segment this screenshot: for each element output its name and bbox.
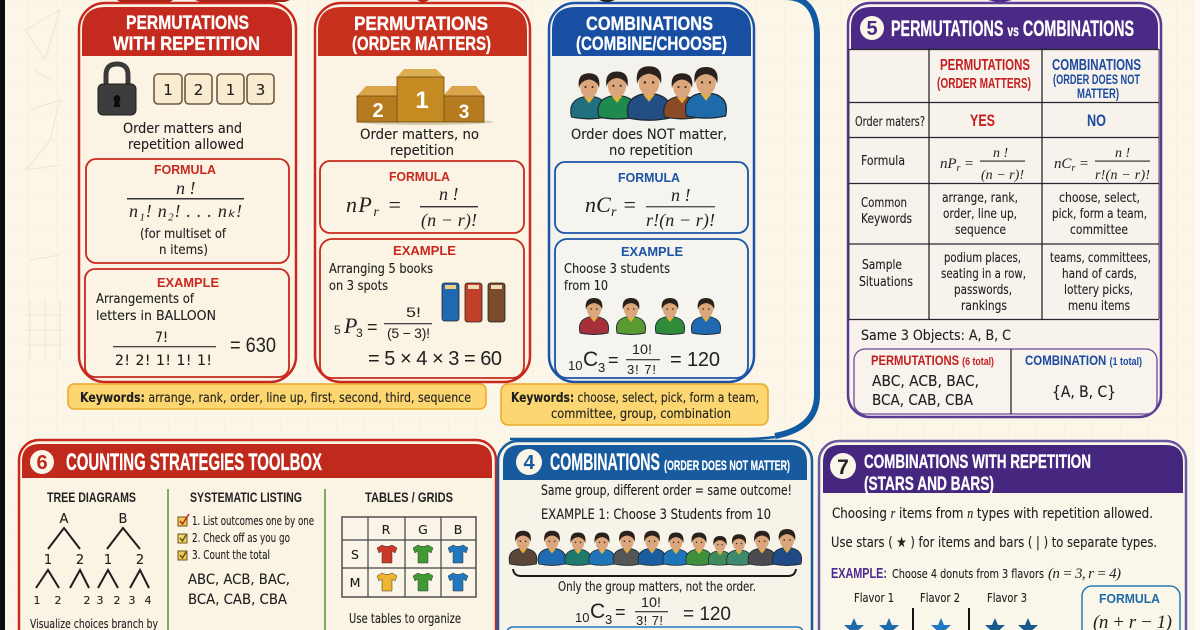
table row: common keywords: Keywords [861,211,912,227]
table column headers: PERMUTATIONS [940,57,1030,74]
example box: = [608,350,619,370]
keywords: combinations: committee, group, combination [551,407,731,422]
icon: padlock [98,64,136,115]
table row: formula: r [956,163,960,174]
table row: sample situations: hand of cards, [1062,266,1137,282]
example box: 7! [155,330,168,346]
table row: sample situations: lottery picks, [1064,282,1133,298]
badge 7: 7 [837,456,849,479]
comparison box: PERMUTATIONS (6 total) [871,352,994,368]
table row: sample situations: teams, committees, [1050,250,1151,266]
text: description: Order does NOT matter, [571,127,727,143]
text: description [360,127,479,159]
table row: formula: n ! [1115,146,1130,161]
text: description: Order matters, no [360,127,479,143]
icon: four students [579,298,721,334]
tree diagram: B [119,512,127,527]
heading [113,13,260,55]
icon: books [442,283,505,322]
formula box: r [373,205,379,220]
example box: EXAMPLE [393,243,456,258]
column: systematic listing: ABC, ACB, BAC, [188,572,290,588]
example box [320,239,524,378]
text: description: Order matters and [123,121,242,137]
panel: combinations combine choose [549,3,754,382]
bracket [513,569,796,576]
example box [85,269,289,377]
formula box: n₁! n₂! . . . nₖ! [129,201,242,221]
example box: 10 [568,358,582,373]
column: systematic listing: SYSTEMATIC LISTING [190,489,302,505]
text: example: EXAMPLE: [831,565,887,582]
keywords: permutations [68,384,486,409]
comparison box: ABC, ACB, BAC, [872,372,979,390]
table column headers: COMBINATIONS [1052,57,1141,74]
example box: EXAMPLE [157,275,219,290]
text: description: repetition [390,143,454,159]
table row: common keywords: committee [1070,222,1128,238]
formula box: FORMULA [154,162,217,177]
table row: order matters: YES [970,111,995,130]
formula box [320,161,524,233]
table row: formula: r [1071,163,1075,174]
example box [555,239,748,378]
keywords: combinations [501,384,768,425]
table column headers [937,57,1141,101]
icon: number tiles: 2 [194,81,203,99]
table row: sample situations [859,250,1151,314]
text: description [571,127,727,159]
text: same 3 objects: Same 3 Objects: A, B, C [861,328,1011,344]
shirt table: M [350,575,360,590]
formula box: n ! [176,178,196,198]
table row: order matters [855,111,1106,130]
column: tables and grids: TABLES / GRIDS [365,489,453,505]
table row: sample situations: menu items [1068,298,1130,314]
table row: order matters: Order maters? [855,114,925,130]
shirt table: R [382,522,391,537]
keywords: permutations: Keywords: arrange, rank, order, line up, first, second, third, sequence [80,391,471,406]
heading [352,14,491,55]
tree diagram: 1 [104,553,112,568]
formula box: r!(n − r)! [646,210,715,231]
table row: sample situations: Situations [859,274,913,290]
comparison box: BCA, CAB, CBA [872,391,974,409]
heading: COMBINATIONS [550,449,660,476]
heading: COMBINATIONS [586,14,713,35]
formula: 10C3: = 120 [683,604,731,625]
formula box: n ! [671,185,690,205]
icon: podium: 2 [372,100,384,122]
formula: 10C3: 10 [575,610,589,625]
formula box [555,162,748,233]
badge 4: 4 [523,452,535,474]
formula box: nC [585,192,611,217]
panel: permutations vs combinations [848,3,1161,417]
column: tree diagrams: TREE DIAGRAMS [47,489,136,505]
table row: formula [861,146,1150,183]
icon: twelve students [509,529,802,566]
table row: common keywords [861,190,1147,238]
tree diagram: 2 [136,553,144,568]
formula: 10C3 [575,594,731,628]
table column headers: (ORDER MATTERS) [937,75,1031,92]
formula box: r [611,205,617,220]
formula: 10C3: 10! [641,594,661,610]
shirt table: G [418,522,428,537]
example box: on 3 spots [329,278,388,294]
column: systematic listing: 1. List outcomes one by one [192,514,314,528]
heading: COMBINATIONS WITH REPETITION [864,452,1091,473]
heading: (STARS AND BARS) [864,474,994,495]
icon: number tiles [154,74,274,104]
comparison box: {A, B, C} [1052,382,1116,401]
heading: (COMBINE/CHOOSE) [576,34,727,55]
table row: sample situations: podium places, [944,250,1021,266]
stars and bars diagram: Flavor 1 [854,590,894,605]
stars and bars diagram: Flavor 2 [920,590,960,605]
shirt table: S [351,547,359,562]
table row: formula: = [960,156,974,172]
icon: checkboxes [178,514,189,560]
column: systematic listing: 2. Check off as you go [192,531,290,545]
text: choosing items: Choosing r items from n types with repetition allowed. [832,506,1153,522]
panel: combinations order does not matter [498,441,812,630]
heading: (ORDER MATTERS) [352,34,491,55]
tree diagram: A [60,512,69,527]
tree diagram: 2 [84,594,90,607]
column: tables and grids [342,489,476,627]
top pointer tips [117,0,1012,3]
example box: 10! [632,341,652,357]
example box: = 120 [670,349,720,371]
badge 6 [30,450,54,474]
example box: P [343,313,357,338]
formula box: (n − r)! [421,210,477,231]
tree diagram: 1 [44,553,52,568]
example box: C [583,348,598,371]
panel: permutations order matters [315,3,530,382]
example box: 5 [334,323,341,337]
tree diagram [34,512,152,607]
formula box: FORMULA [1099,591,1161,606]
table row: formula: nC [1054,156,1071,172]
badge 6: 6 [36,452,48,474]
table row: common keywords: sequence [955,222,1006,238]
text: description: no repetition [609,143,693,159]
comparison box: COMBINATION (1 total) [1025,352,1142,368]
formula box [1082,586,1180,630]
example box: 3 [598,360,605,375]
tree diagram: 2 [54,594,62,607]
formula box: n items) [159,242,208,258]
formula: 10C3: C [590,600,605,623]
text: only the group matters: Only the group matters, not the order. [558,579,756,595]
example box: = [367,317,378,337]
example box: 2! 2! 1! 1! 1! [115,353,212,369]
formula box [86,159,289,263]
table row: sample situations: seating in a row, [941,266,1026,282]
table column headers: (ORDER DOES NOT [1053,72,1141,87]
heading: PERMUTATIONS [126,13,249,34]
text: example: Choose 4 donuts from 3 flavors [892,566,1044,581]
table row: order matters: NO [1087,111,1106,130]
icon: number tiles: 3 [256,81,265,99]
table row: sample situations: Sample [862,257,902,273]
icon: podium: 3 [459,102,469,123]
text: example 1: EXAMPLE 1: Choose 3 Students from 10 [541,507,771,523]
heading: COUNTING STRATEGIES TOOLBOX [66,449,322,476]
badge 5 [860,16,884,40]
text: description: repetition allowed [128,137,244,153]
column: tree diagrams [30,489,158,630]
table row: common keywords: arrange, rank, [942,190,1018,206]
example box: 3! 7! [627,362,656,377]
example box: (5 − 3)! [387,325,430,341]
stars and bars diagram: Flavor 3 [987,590,1027,605]
example box: EXAMPLE [621,244,683,259]
keywords: combinations: Keywords: choose, select, pick, form a team, [511,391,759,406]
big blue frame around panels [510,0,817,439]
heading [576,14,727,55]
stars and bars diagram [844,590,1038,630]
icon: number tiles: 1 [163,81,173,99]
icon: number tiles: 1 [226,81,235,99]
icon: podium: 1 [415,87,429,114]
icon: group of five people [571,66,726,120]
text: same group: Same group, different order = same outcome! [541,483,792,499]
formula: 10C3: 3! 7! [636,613,663,628]
table row: common keywords: order, line up, [943,206,1017,222]
example box: = 5 × 4 × 3 = 60 [368,348,502,370]
column: systematic listing: BCA, CAB, CBA [188,592,287,608]
tree diagram: 1 [34,594,40,607]
column: systematic listing [178,489,314,608]
table row: formula: (n − r)! [981,168,1024,183]
formula: 10C3: = [615,602,626,622]
formula box: (for multiset of [140,226,227,242]
tree diagram: 3 [128,594,136,607]
tree diagram: 4 [144,594,152,607]
formula box: n ! [439,184,458,204]
formula box: FORMULA [618,170,681,185]
example box: letters in BALLOON [96,308,216,324]
table row: common keywords: pick, form a team, [1052,206,1147,222]
tree diagram: 2 [114,594,120,607]
table row: formula: Formula [861,153,905,169]
tree diagram: 3 [96,594,104,607]
tree diagram: 2 [76,553,84,568]
heading: WITH REPETITION [113,34,260,55]
badge 5: 5 [866,18,878,40]
example box: = 630 [230,334,276,357]
panel: counting strategies toolbox [19,440,496,630]
table row: formula: r!(n − r)! [1095,168,1150,183]
icon: podium [357,69,493,125]
table column headers: MATTER) [1077,86,1119,101]
badge 4 [516,449,542,475]
table row: sample situations: passwords, [954,282,1012,298]
panel: combinations with repetition [819,441,1186,630]
example box: Arrangements of [96,291,195,307]
heading: PERMUTATIONS [354,14,488,35]
formula box: FORMULA [389,169,451,184]
formula box: = [380,192,402,217]
table row: formula: = [1075,156,1089,172]
heading: (ORDER DOES NOT MATTER) [664,457,790,473]
example box: 3 [356,326,363,340]
panel: permutations with repetition [79,3,296,382]
comparison box [854,349,1157,414]
badge 7 [830,453,856,479]
table row: formula: n ! [993,146,1008,161]
formula: 10C3: 3 [605,612,612,627]
heading [864,452,1091,495]
example box: from 10 [564,278,608,294]
table row: common keywords: choose, select, [1059,190,1140,206]
table row: common keywords: Common [861,195,907,211]
example box: Choose 3 students [564,261,670,277]
shirt table [342,517,476,597]
example box: 5! [406,304,421,320]
shirt table: B [454,522,462,537]
text: example [831,565,1121,582]
table row: formula: nP [940,156,957,172]
text: example: (n = 3, r = 4) [1048,566,1121,582]
column: systematic listing: 3. Count the total [192,548,270,562]
column: tables and grids: Use tables to organize [349,612,461,627]
formula box: nP [346,192,372,217]
table grid [849,49,1159,320]
formula box: = [617,192,637,217]
text: description [123,121,244,153]
example box: Arranging 5 books [329,261,433,277]
heading: PERMUTATIONS vs COMBINATIONS [891,16,1134,41]
table row: sample situations: rankings [961,298,1007,314]
